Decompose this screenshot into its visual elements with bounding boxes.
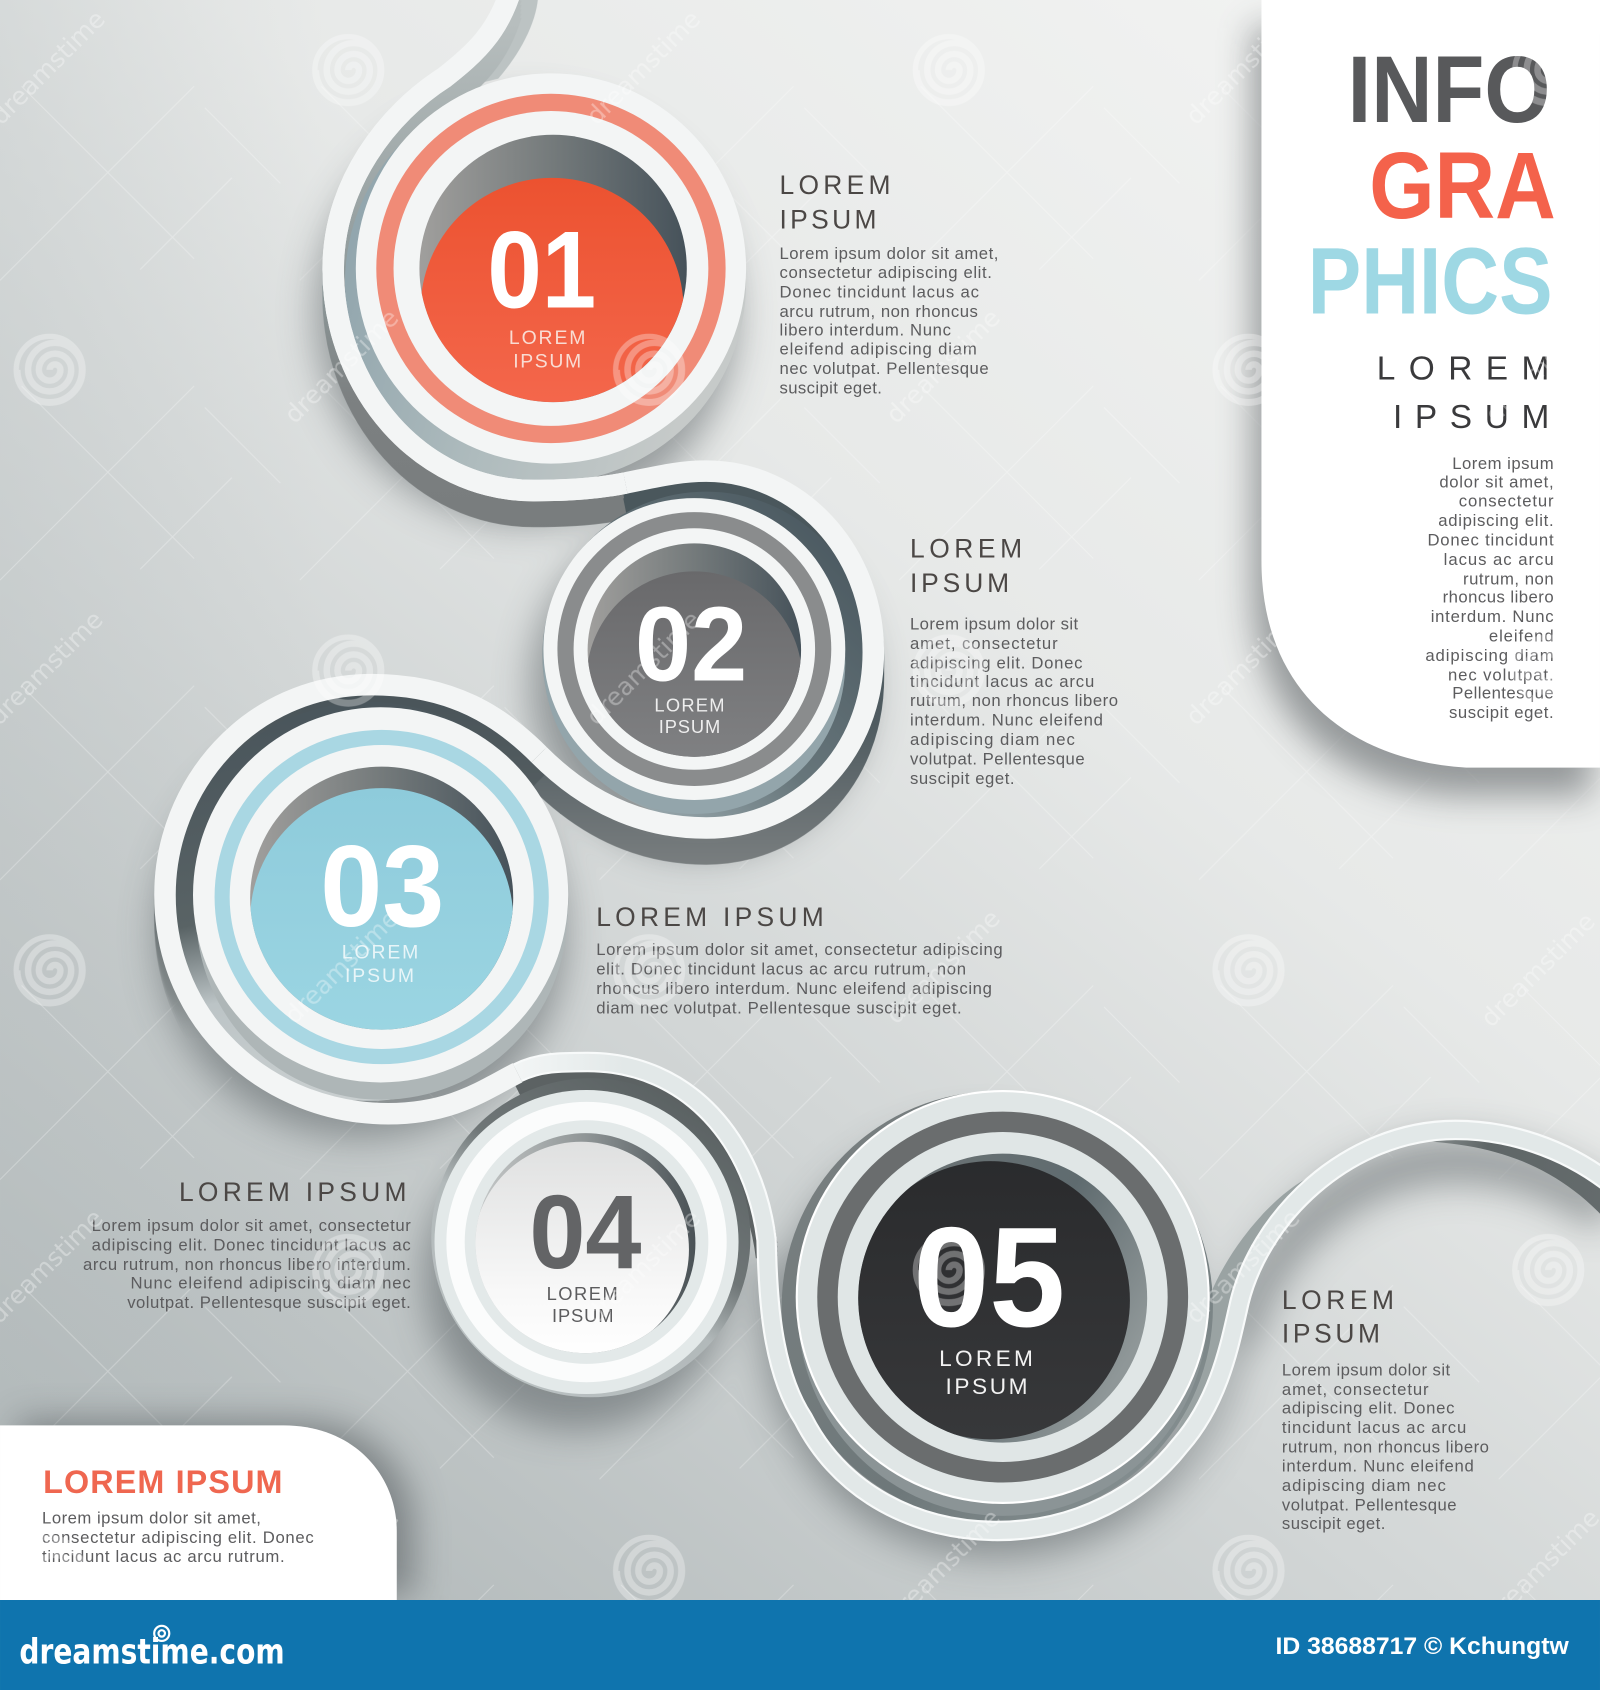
title panel body text: adipiscing elit. xyxy=(1438,511,1554,530)
text block 1: nec volutpat. Pellentesque xyxy=(780,359,989,378)
text block 3: LOREM IPSUM xyxy=(596,902,824,932)
text block 3 xyxy=(596,902,1003,1017)
panel: title xyxy=(1261,0,1600,768)
text block 3: diam nec volutpat. Pellentesque suscipit eget. xyxy=(596,998,962,1017)
circle 5: black xyxy=(796,1090,1210,1516)
text block 2: suscipit eget. xyxy=(910,769,1015,788)
text block 1: Lorem ipsum dolor sit amet, xyxy=(780,244,998,263)
watermark spirals and text: dreamstime xyxy=(880,1503,1006,1629)
title: PHICS: PHICS xyxy=(1308,229,1553,335)
circle 3 label: IPSUM xyxy=(345,965,414,987)
text block 5: adipiscing elit. Donec xyxy=(1282,1398,1454,1417)
title panel body text: Lorem ipsum xyxy=(1452,454,1554,473)
note body xyxy=(42,1508,314,1566)
text block 2: volutpat. Pellentesque xyxy=(910,749,1085,768)
number 01: 01 xyxy=(487,208,596,331)
circle 4 label: LOREM xyxy=(547,1283,618,1304)
title panel body text xyxy=(1425,454,1554,722)
text block 1: libero interdum. Nunc xyxy=(780,320,951,339)
text block 5: volutpat. Pellentesque xyxy=(1282,1495,1457,1514)
subtitle: LOREM xyxy=(1377,351,1549,388)
watermark spirals and text: dreamstime xyxy=(880,904,1006,1029)
circle 5 label xyxy=(939,1346,1033,1399)
text block 1: suscipit eget. xyxy=(780,379,882,398)
title panel body text: rhoncus libero xyxy=(1443,588,1554,607)
circle 3 label: LOREM xyxy=(342,941,418,963)
text block 1: consectetur adipiscing elit. xyxy=(780,263,992,282)
watermark spirals and text: dreamstime xyxy=(1475,907,1600,1033)
text block 2: interdum. Nunc eleifend xyxy=(910,711,1103,730)
text block 2 xyxy=(910,533,1118,788)
text block 4: adipiscing elit. Donec tincidunt lacus ac xyxy=(92,1236,411,1255)
footer bar xyxy=(0,1600,1600,1690)
title panel body text: nec volutpat. xyxy=(1448,665,1554,684)
text block 3: elit. Donec tincidunt lacus ac arcu rutrum, non xyxy=(596,960,966,979)
circle 5 label: IPSUM xyxy=(946,1374,1027,1399)
text block 1: IPSUM xyxy=(780,205,877,235)
text block 2: LOREM xyxy=(910,533,1022,563)
circle recess backings xyxy=(169,82,1213,1522)
circle 3: blue xyxy=(193,707,568,1100)
circle 2 label: IPSUM xyxy=(659,716,720,737)
title: GRA: GRA xyxy=(1369,133,1556,239)
panel: bottom-left note xyxy=(0,1425,397,1600)
text block 5: interdum. Nunc eleifend xyxy=(1282,1457,1474,1476)
title panel body text: rutrum, non xyxy=(1463,569,1554,588)
number 05: 05 xyxy=(913,1198,1065,1357)
circle 4: white xyxy=(435,1090,739,1394)
footer logo: dreamstime.com xyxy=(19,1633,285,1673)
title panel body text: adipiscing diam xyxy=(1425,646,1554,665)
title panel body text: interdum. Nunc xyxy=(1431,607,1554,626)
title panel body text: Pellentesque xyxy=(1452,684,1554,703)
footer id: ID 38688717 © Kchungtw xyxy=(1275,1634,1569,1660)
watermark spirals and text: dreamstime xyxy=(580,1203,706,1329)
title panel body text: Donec tincidunt xyxy=(1427,531,1554,550)
text block 4: LOREM IPSUM xyxy=(179,1177,406,1207)
title panel body text: lacus ac arcu xyxy=(1444,550,1554,569)
title: INFO: INFO xyxy=(1348,37,1550,143)
number 02: 02 xyxy=(635,585,747,703)
text block 4: arcu rutrum, non rhoncus libero interdum. xyxy=(83,1255,411,1274)
text block 2: tincidunt lacus ac arcu xyxy=(910,672,1094,691)
text block 4: Nunc eleifend adipiscing diam nec xyxy=(130,1273,411,1292)
text block 5: amet, consectetur xyxy=(1282,1380,1429,1399)
circle 2: grey xyxy=(543,498,845,814)
text block 1: Donec tincidunt lacus ac xyxy=(780,283,979,302)
text block 2: rutrum, non rhoncus libero xyxy=(910,691,1118,710)
soft shadows under ribbon and circles xyxy=(156,101,1600,1550)
watermark spirals and text: dreamstime xyxy=(580,4,706,130)
circle 2 label xyxy=(654,695,725,737)
text block 1: eleifend adipiscing diam xyxy=(780,340,977,359)
text block 5: IPSUM xyxy=(1282,1318,1380,1348)
ribbon side walls xyxy=(165,0,873,1257)
watermark spirals and text: dreamstime xyxy=(580,605,706,731)
text block 2: amet, consectetur xyxy=(910,634,1058,653)
text block 5: suscipit eget. xyxy=(1282,1514,1385,1533)
note body: tincidunt lacus ac arcu rutrum. xyxy=(42,1547,285,1566)
watermark spirals and text: dreamstime xyxy=(278,303,404,429)
text block 5 xyxy=(1282,1285,1489,1533)
watermark spirals and text: dreamstime xyxy=(1180,4,1305,130)
circle 1: red xyxy=(356,73,746,464)
watermark spirals and text: dreamstime xyxy=(1180,605,1305,731)
watermark spirals and text: dreamstime xyxy=(1180,1203,1305,1329)
text block 3: Lorem ipsum dolor sit amet, consectetur adipiscing xyxy=(596,940,1003,959)
text block 5: tincidunt lacus ac arcu xyxy=(1282,1418,1466,1437)
circle 5 label: LOREM xyxy=(939,1346,1033,1371)
text block 1 xyxy=(780,170,998,398)
icon: logo spiral xyxy=(154,1626,169,1641)
number 04: 04 xyxy=(529,1174,642,1291)
text block 2: IPSUM xyxy=(910,568,1009,598)
circle 3 label xyxy=(342,941,418,987)
text block 5: LOREM xyxy=(1282,1285,1394,1315)
circle 1 label xyxy=(509,327,585,373)
watermark spirals and text: dreamstime xyxy=(880,303,1006,429)
circle 4 label xyxy=(547,1283,618,1326)
text block 3: rhoncus libero interdum. Nunc eleifend adipiscing xyxy=(596,979,992,998)
circle 1 label: LOREM xyxy=(509,327,585,349)
note body: Lorem ipsum dolor sit amet, xyxy=(42,1508,261,1527)
note body: consectetur adipiscing elit. Donec xyxy=(42,1528,314,1547)
text block 4: Lorem ipsum dolor sit amet, consectetur xyxy=(92,1216,411,1235)
last arc wall crescents xyxy=(1159,1128,1600,1464)
text block 5: adipiscing diam nec xyxy=(1282,1476,1446,1495)
note heading: LOREM IPSUM xyxy=(43,1464,282,1500)
text block 1: LOREM xyxy=(780,170,891,200)
title panel body text: dolor sit amet, xyxy=(1439,472,1554,491)
subtitle xyxy=(1377,351,1549,436)
title panel body text: eleifend xyxy=(1489,626,1554,645)
text block 2: adipiscing elit. Donec xyxy=(910,653,1082,672)
circle 2 label: LOREM xyxy=(654,695,725,716)
text block 4 xyxy=(83,1177,411,1312)
title panel body text: suscipit eget. xyxy=(1449,703,1554,722)
text block 4: volutpat. Pellentesque suscipit eget. xyxy=(127,1293,411,1312)
text block 5: Lorem ipsum dolor sit xyxy=(1282,1361,1450,1380)
watermark spirals and text: dreamstime xyxy=(278,904,404,1029)
subtitle: IPSUM xyxy=(1393,399,1549,436)
title panel body text: consectetur xyxy=(1459,492,1554,511)
number 03: 03 xyxy=(320,821,444,951)
text block 1: arcu rutrum, non rhoncus xyxy=(780,302,978,321)
circle 4 label: IPSUM xyxy=(552,1305,613,1326)
watermark spirals and text: dreamstime xyxy=(278,1503,404,1629)
text block 5: rutrum, non rhoncus libero xyxy=(1282,1437,1489,1456)
text block 2: adipiscing diam nec xyxy=(910,730,1075,749)
ribbon top wall xyxy=(458,0,538,88)
circle 1 label: IPSUM xyxy=(513,351,581,373)
text block 2: Lorem ipsum dolor sit xyxy=(910,615,1079,634)
